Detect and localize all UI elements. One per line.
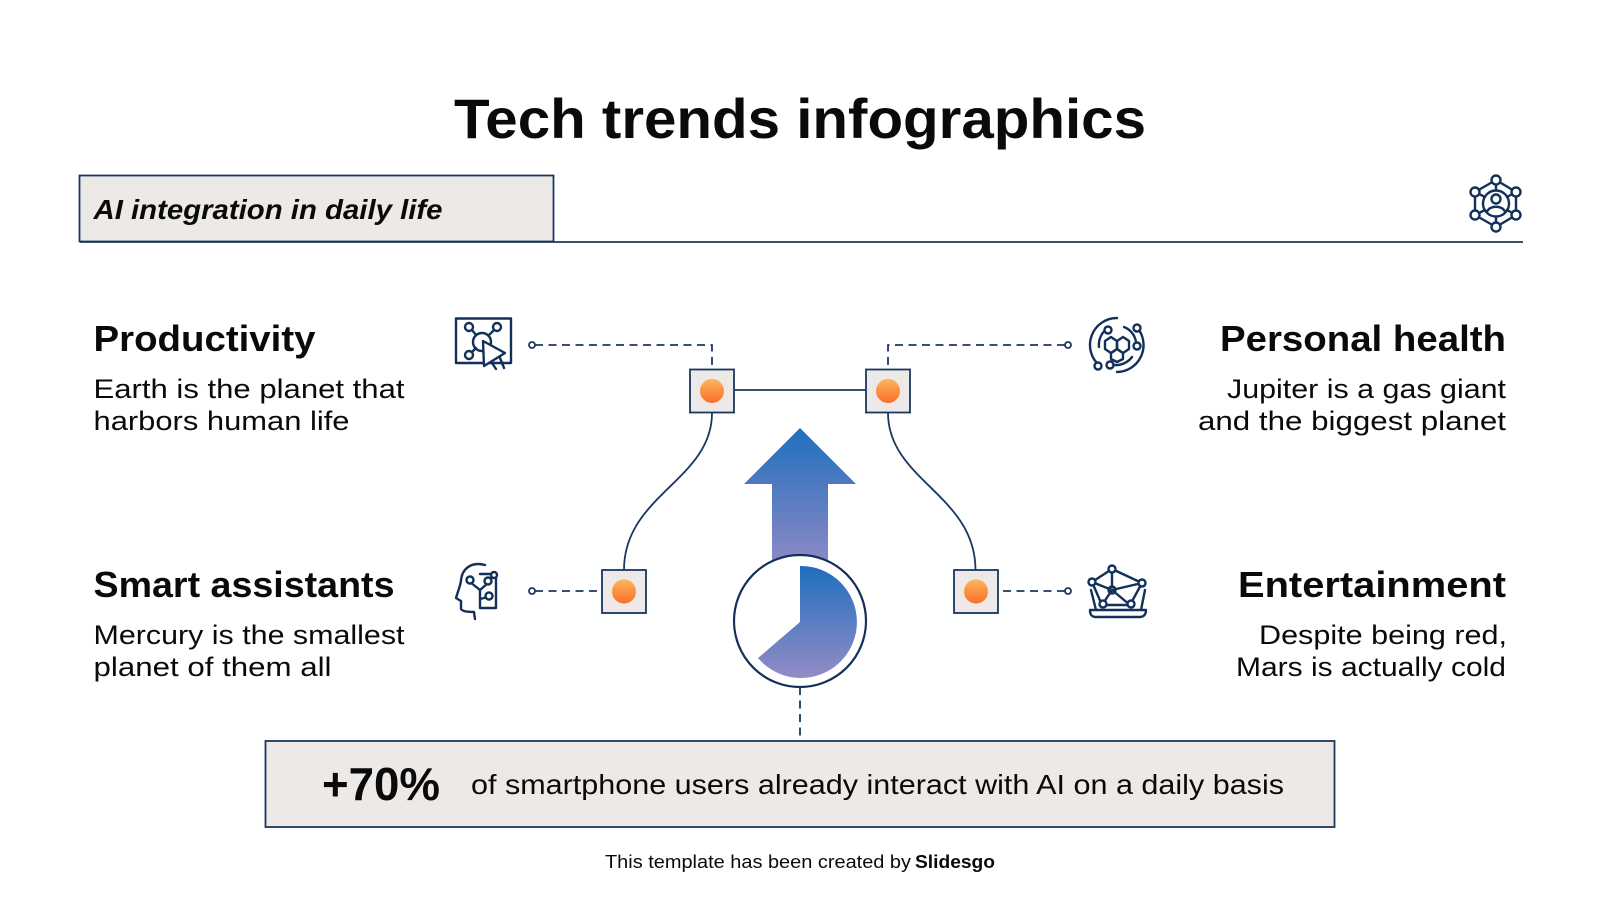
panel: smart assistants: Mercury is the smallest [94, 620, 405, 650]
node: top right [866, 370, 910, 412]
callout: of smartphone users already interact with AI on a daily basis [471, 769, 1284, 800]
node: bottom right [954, 570, 998, 613]
connector: bottom left dashed [529, 588, 602, 594]
connector: left curve [624, 413, 712, 570]
panel: entertainment [1236, 564, 1507, 682]
subtitle banner [80, 176, 1523, 242]
panel: personal health [1198, 318, 1507, 436]
node: top left [690, 370, 734, 412]
subtitle banner: AI integration in daily life [92, 194, 442, 225]
panel: personal health: Jupiter is a gas giant [1227, 374, 1507, 404]
panel: productivity: Earth is the planet that [94, 374, 405, 404]
panel: productivity: harbors human life [94, 406, 350, 436]
callout [266, 741, 1334, 827]
footer credit: This template has been created by [605, 852, 911, 872]
footer credit: Slidesgo [915, 852, 995, 872]
icon: head with circuit [456, 564, 497, 619]
panel: personal health: and the biggest planet [1198, 406, 1507, 436]
panel: productivity: Productivity [94, 318, 316, 359]
pie chart: 70% [734, 555, 866, 687]
callout: +70% [322, 758, 440, 810]
node: bottom left [602, 570, 646, 613]
panel: smart assistants [94, 564, 405, 682]
panel: entertainment: Mars is actually cold [1236, 652, 1506, 682]
connector: bottom right dashed [998, 588, 1071, 594]
connector: horizontal line [734, 389, 866, 391]
connector: right curve [888, 413, 976, 570]
panel: smart assistants: Smart assistants [94, 564, 394, 605]
icon: hexagon molecule [1090, 318, 1144, 372]
connector: top left dashed [529, 342, 712, 369]
icon: network with person [1470, 176, 1520, 232]
panel: productivity [94, 318, 405, 436]
arrow: up [744, 428, 856, 565]
panel: entertainment: Entertainment [1238, 564, 1506, 605]
title: Tech trends infographics [454, 87, 1146, 150]
icon: laptop with network [1088, 566, 1146, 617]
panel: personal health: Personal health [1220, 318, 1506, 359]
panel: entertainment: Despite being red, [1259, 620, 1507, 650]
connector: top right dashed [888, 342, 1071, 369]
connector: pie to callout [799, 687, 801, 741]
panel: smart assistants: planet of them all [94, 652, 332, 682]
icon: screen with cursor [456, 318, 511, 369]
